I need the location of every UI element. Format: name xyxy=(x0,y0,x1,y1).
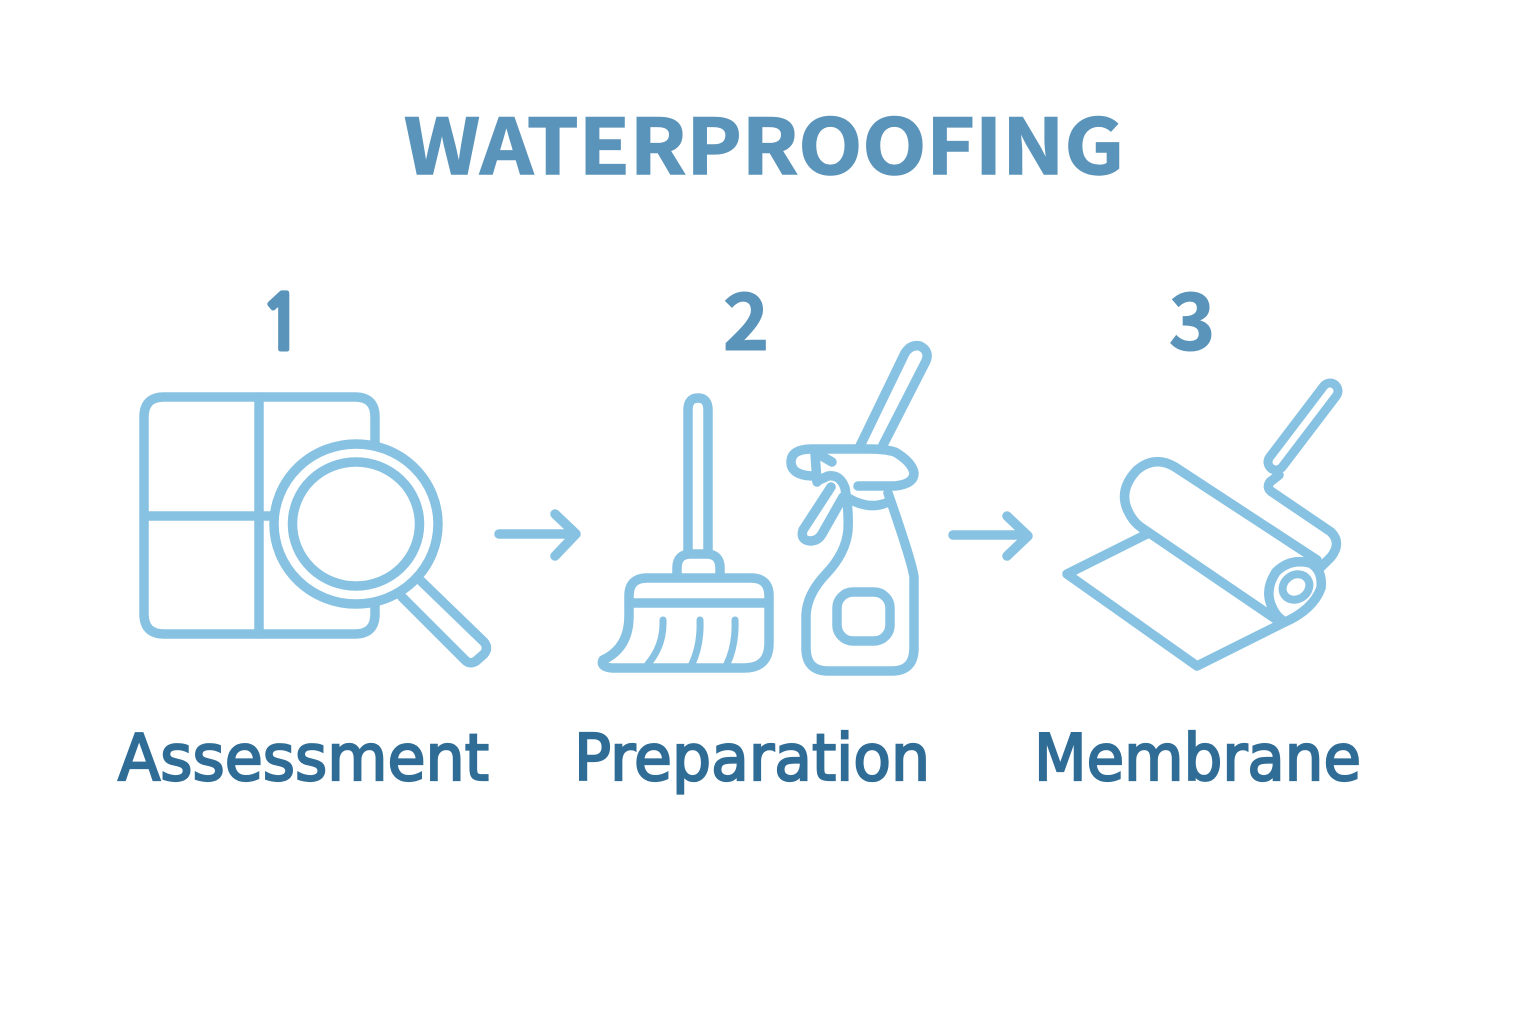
title: WATERPROOFING xyxy=(404,86,1124,196)
icon: membrane roll with roller xyxy=(1067,391,1336,666)
arrow: step 2 to step 3 xyxy=(953,516,1028,556)
label: Preparation: Preparation xyxy=(574,722,930,796)
arrow: step 1 to step 2 xyxy=(499,514,576,556)
icon: spray bottle xyxy=(791,346,927,671)
icon: broom xyxy=(602,398,769,668)
label: Assessment: Assessment xyxy=(118,722,489,796)
icon: tile grid with magnifying glass xyxy=(144,397,486,663)
roller handle xyxy=(1276,391,1330,462)
step 2 number: 2 xyxy=(723,258,769,373)
label: Membrane: Membrane xyxy=(1034,722,1361,796)
step 3 number: 3 xyxy=(1169,258,1215,373)
step 1 number: 1 xyxy=(259,287,305,362)
